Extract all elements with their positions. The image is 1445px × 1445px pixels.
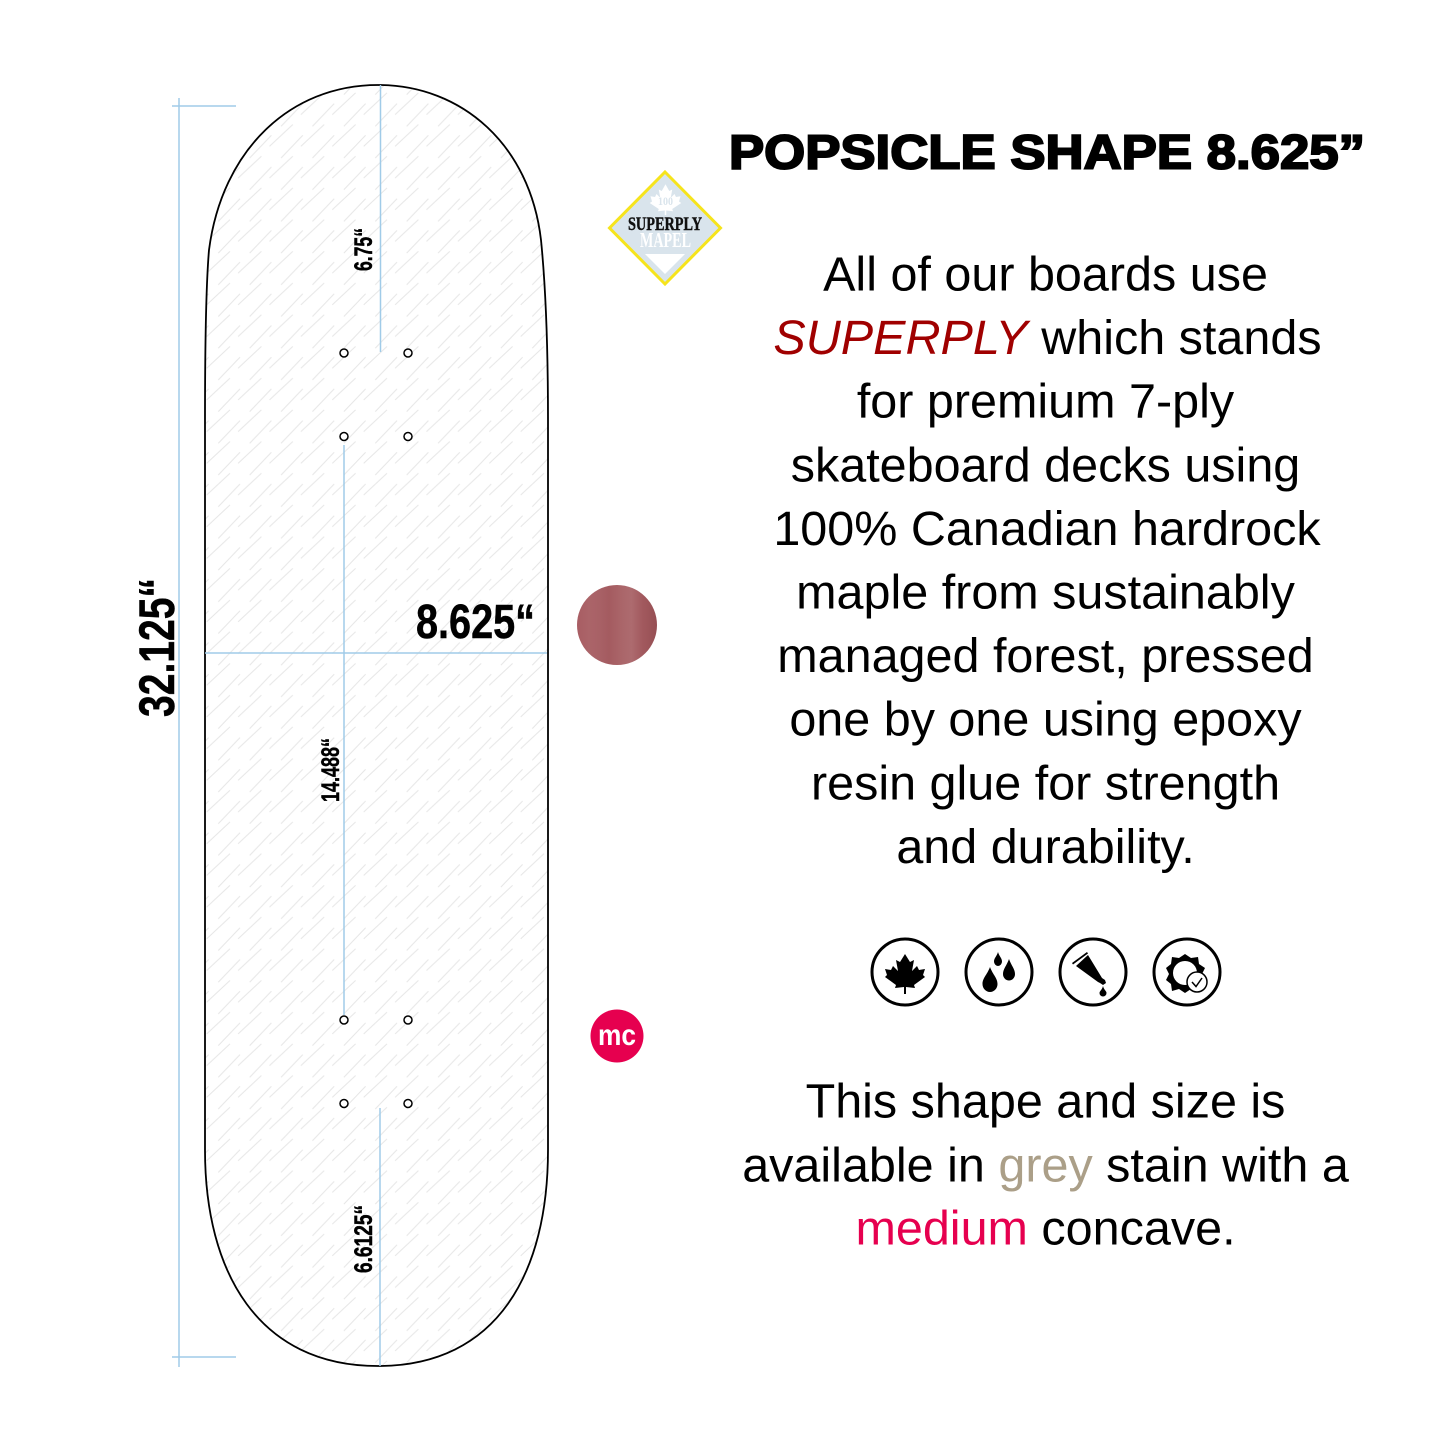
truck mounting holes	[340, 349, 412, 1108]
medium concave badge: mc	[598, 1019, 636, 1052]
availability text block	[742, 1074, 1349, 1256]
title: POPSICLE SHAPE 8.625”	[729, 126, 1365, 180]
badge maple leaf	[650, 184, 681, 215]
grey stain wood swatch	[577, 585, 657, 665]
width label: 8.625“	[416, 596, 535, 649]
description text block: 100% Canadian hardrock	[773, 502, 1321, 556]
description text block: for premium 7-ply	[857, 374, 1235, 428]
description text block: skateboard decks using	[791, 438, 1300, 492]
deck dimension lines	[205, 85, 547, 1366]
medium concave badge	[590, 1010, 644, 1062]
description text block	[773, 248, 1322, 874]
description text block: resin glue for strength	[811, 756, 1280, 810]
badge 100: 100	[658, 194, 673, 208]
overall length dimension lines	[172, 98, 236, 1367]
check badge	[1187, 972, 1207, 992]
description text block: maple from sustainably	[796, 566, 1296, 620]
superply maple badge	[610, 172, 720, 284]
description text block: All of our boards use	[823, 248, 1268, 302]
length label: 32.125“	[129, 578, 185, 717]
icon: quality seal	[1154, 939, 1220, 1005]
badge triangle	[645, 254, 685, 274]
wheelbase label: 14.488“	[317, 738, 345, 802]
nose wheelbase label: 6.75“	[350, 228, 378, 271]
icon: glue tube	[1060, 939, 1126, 1005]
tail label: 6.6125“	[350, 1205, 378, 1273]
icon: water drops	[966, 939, 1032, 1005]
skateboard deck outline	[205, 85, 548, 1366]
availability text block: This shape and size is	[806, 1074, 1285, 1128]
description text block: SUPERPLY which stands	[773, 311, 1322, 365]
description text block: managed forest, pressed	[777, 629, 1314, 683]
description text block: one by one using epoxy	[789, 692, 1302, 746]
availability text block: available in grey stain with a	[742, 1138, 1349, 1192]
availability text block: medium concave.	[855, 1202, 1236, 1256]
icon: maple leaf	[872, 939, 938, 1005]
badge mapel: MAPEL	[640, 228, 691, 252]
description text block: and durability.	[896, 820, 1195, 874]
badge superply: SUPERPLY	[628, 215, 702, 235]
